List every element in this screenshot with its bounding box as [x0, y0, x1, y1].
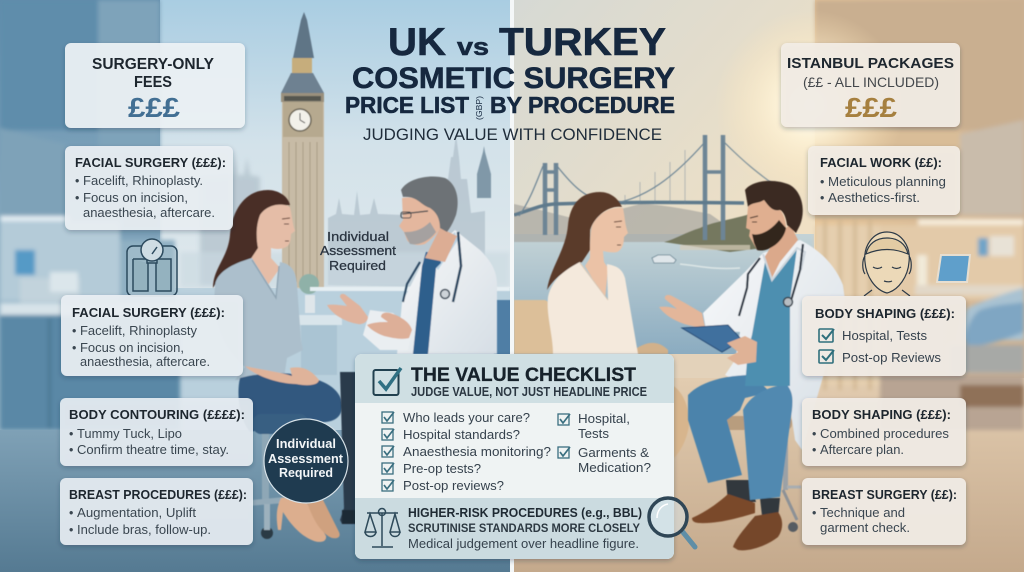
background: Istanbul clinic interior — [815, 0, 1024, 430]
panel: body shaping — [802, 398, 966, 466]
panel: facial work — [808, 146, 960, 215]
checklist questions: Tests — [578, 427, 609, 441]
checklist heading: JUDGE VALUE, NOT JUST HEADLINE PRICE — [411, 385, 647, 399]
panel: facial surgery 1: Focus on incision, — [83, 191, 188, 205]
checklist questions: Hospital, — [578, 412, 630, 426]
higher-risk text — [408, 506, 642, 551]
panel: facial surgery 2: Facelift, Rhinoplasty — [80, 324, 198, 338]
panel: body contouring: Confirm theatre time, stay. — [77, 443, 229, 457]
panel: facial work: FACIAL WORK (££): — [820, 156, 942, 170]
panel: breast procedures: Include bras, follow-up. — [77, 523, 211, 537]
title: vs — [457, 34, 489, 61]
panel: facial work: Aesthetics-first. — [828, 191, 920, 205]
panel: facial surgery 1: • — [75, 191, 79, 205]
panel: breast surgery: • — [812, 506, 816, 520]
background: UK clinic side — [0, 0, 511, 572]
label: individual assessment: Assessment — [320, 243, 396, 258]
title — [345, 21, 675, 144]
panel: body shaping checklist: BODY SHAPING (£££): — [815, 307, 955, 321]
panel: breast procedures: • — [69, 523, 73, 537]
panel: Istanbul packages: £££ — [845, 92, 897, 123]
label: individual assessment: Required — [329, 258, 386, 273]
icons: item checkboxes — [382, 412, 570, 491]
title: (GBP) — [475, 96, 484, 120]
panel: facial surgery 1: anaesthesia, aftercare. — [83, 206, 215, 220]
panel: facial surgery 1: Facelift, Rhinoplasty. — [83, 174, 203, 188]
illustration: UK patient — [213, 190, 342, 542]
illustration: UK doctor — [327, 176, 497, 524]
panel: facial surgery 2: anaesthesia, aftercare. — [80, 355, 210, 369]
callout: individual assessment badge: Required — [279, 465, 333, 480]
panel: breast surgery — [802, 478, 966, 545]
checklist questions: Medication? — [578, 461, 651, 475]
title: UK — [388, 21, 446, 64]
checklist heading: THE VALUE CHECKLIST — [411, 365, 636, 386]
panel: body shaping: Combined procedures — [820, 427, 949, 441]
checklist heading — [411, 365, 647, 399]
panel: body shaping checklist: Hospital, Tests — [842, 329, 927, 343]
checklist questions — [403, 411, 651, 493]
checklist questions: Garments & — [578, 446, 650, 460]
illustration: UK plant and side table — [296, 274, 511, 375]
panel: Istanbul packages: (££ - ALL INCLUDED) — [803, 74, 939, 90]
panel: breast surgery: BREAST SURGERY (££): — [812, 488, 957, 502]
checklist questions: Hospital standards? — [403, 428, 520, 442]
illustration: London skyline and Big Ben — [180, 12, 510, 288]
checklist questions: Pre-op tests? — [403, 462, 481, 476]
higher-risk text: HIGHER-RISK PROCEDURES (e.g., BBL) — [408, 506, 642, 520]
panel: facial surgery 1: FACIAL SURGERY (£££): — [75, 156, 226, 170]
panel: body shaping checklist: Post-op Reviews — [842, 351, 941, 365]
panel: surgery-only fees: £££ — [128, 92, 180, 123]
panel: facial surgery 2: FACIAL SURGERY (£££): — [72, 306, 225, 320]
panel: facial work: • — [820, 191, 824, 205]
divider — [510, 0, 514, 572]
checklist questions: Post-op reviews? — [403, 479, 504, 493]
panel: body contouring: • — [69, 427, 73, 441]
panel: facial surgery 2 — [61, 295, 243, 376]
panel: facial surgery 1: • — [75, 174, 79, 188]
checklist questions: Anaesthesia monitoring? — [403, 445, 551, 459]
panel: breast procedures: Augmentation, Uplift — [77, 506, 197, 520]
title: BY PROCEDURE — [490, 92, 675, 118]
title: TURKEY — [499, 21, 666, 64]
panel: breast procedures: BREAST PROCEDURES (£££): — [69, 488, 247, 502]
illustration: Istanbul doctor — [659, 181, 845, 550]
icon: large checkbox — [374, 368, 401, 395]
icon: balance scales — [365, 508, 400, 547]
panel: value checklist — [355, 354, 674, 559]
label: individual assessment — [320, 229, 396, 273]
icon: magnifying glass — [649, 498, 695, 547]
label: individual assessment: Individual — [327, 229, 389, 244]
title: JUDGING VALUE WITH CONFIDENCE — [363, 125, 662, 144]
panel: facial surgery 2: • — [72, 341, 76, 355]
panel: body contouring: BODY CONTOURING (££££): — [69, 408, 245, 422]
panel: body contouring: • — [69, 443, 73, 457]
panel: facial surgery 2: Focus on incision, — [80, 341, 184, 355]
panel: facial work: Meticulous planning — [828, 175, 946, 189]
sun glow — [715, 10, 905, 200]
illustration: Bosphorus bridge — [514, 135, 784, 269]
panel: facial surgery 2: • — [72, 324, 76, 338]
panel: surgery-only fees: SURGERY-ONLY — [92, 56, 215, 73]
panel: surgery-only fees — [65, 43, 245, 128]
title: COSMETIC SURGERY — [352, 62, 675, 95]
panel: facial work: • — [820, 175, 824, 189]
callout: individual assessment badge: Individual — [276, 436, 336, 451]
panel: body contouring — [60, 398, 253, 466]
title: PRICE LIST — [345, 92, 469, 118]
panel: body shaping: • — [812, 443, 816, 457]
panel: facial surgery 1 — [65, 146, 233, 230]
panel: body contouring: Tummy Tuck, Lipo — [77, 427, 182, 441]
panel: Istanbul packages — [781, 43, 960, 127]
panel: surgery-only fees: FEES — [134, 74, 172, 91]
panel: Istanbul packages: ISTANBUL PACKAGES — [787, 55, 954, 72]
higher-risk text: SCRUTINISE STANDARDS MORE CLOSELY — [408, 521, 640, 535]
checklist questions: Who leads your care? — [403, 411, 530, 425]
callout: individual assessment badge: Assessment — [268, 451, 344, 466]
icon: face outline — [863, 232, 911, 296]
higher-risk text: Medical judgement over headline figure. — [408, 537, 639, 551]
panel: breast procedures: • — [69, 506, 73, 520]
panel: breast surgery: garment check. — [820, 521, 910, 535]
panel: breast procedures — [60, 478, 253, 545]
icon: weighing scale — [127, 239, 177, 296]
illustration: Istanbul patient and chair — [514, 192, 689, 458]
panel: body shaping checklist — [802, 296, 966, 376]
panel: body shaping: Aftercare plan. — [820, 443, 904, 457]
Big Ben tower — [281, 12, 324, 288]
callout: individual assessment badge — [264, 419, 348, 503]
panel: body shaping: BODY SHAPING (£££): — [812, 408, 951, 422]
panel: body shaping: • — [812, 427, 816, 441]
panel: breast surgery: Technique and — [820, 506, 905, 520]
background: Turkey side — [514, 0, 1024, 572]
